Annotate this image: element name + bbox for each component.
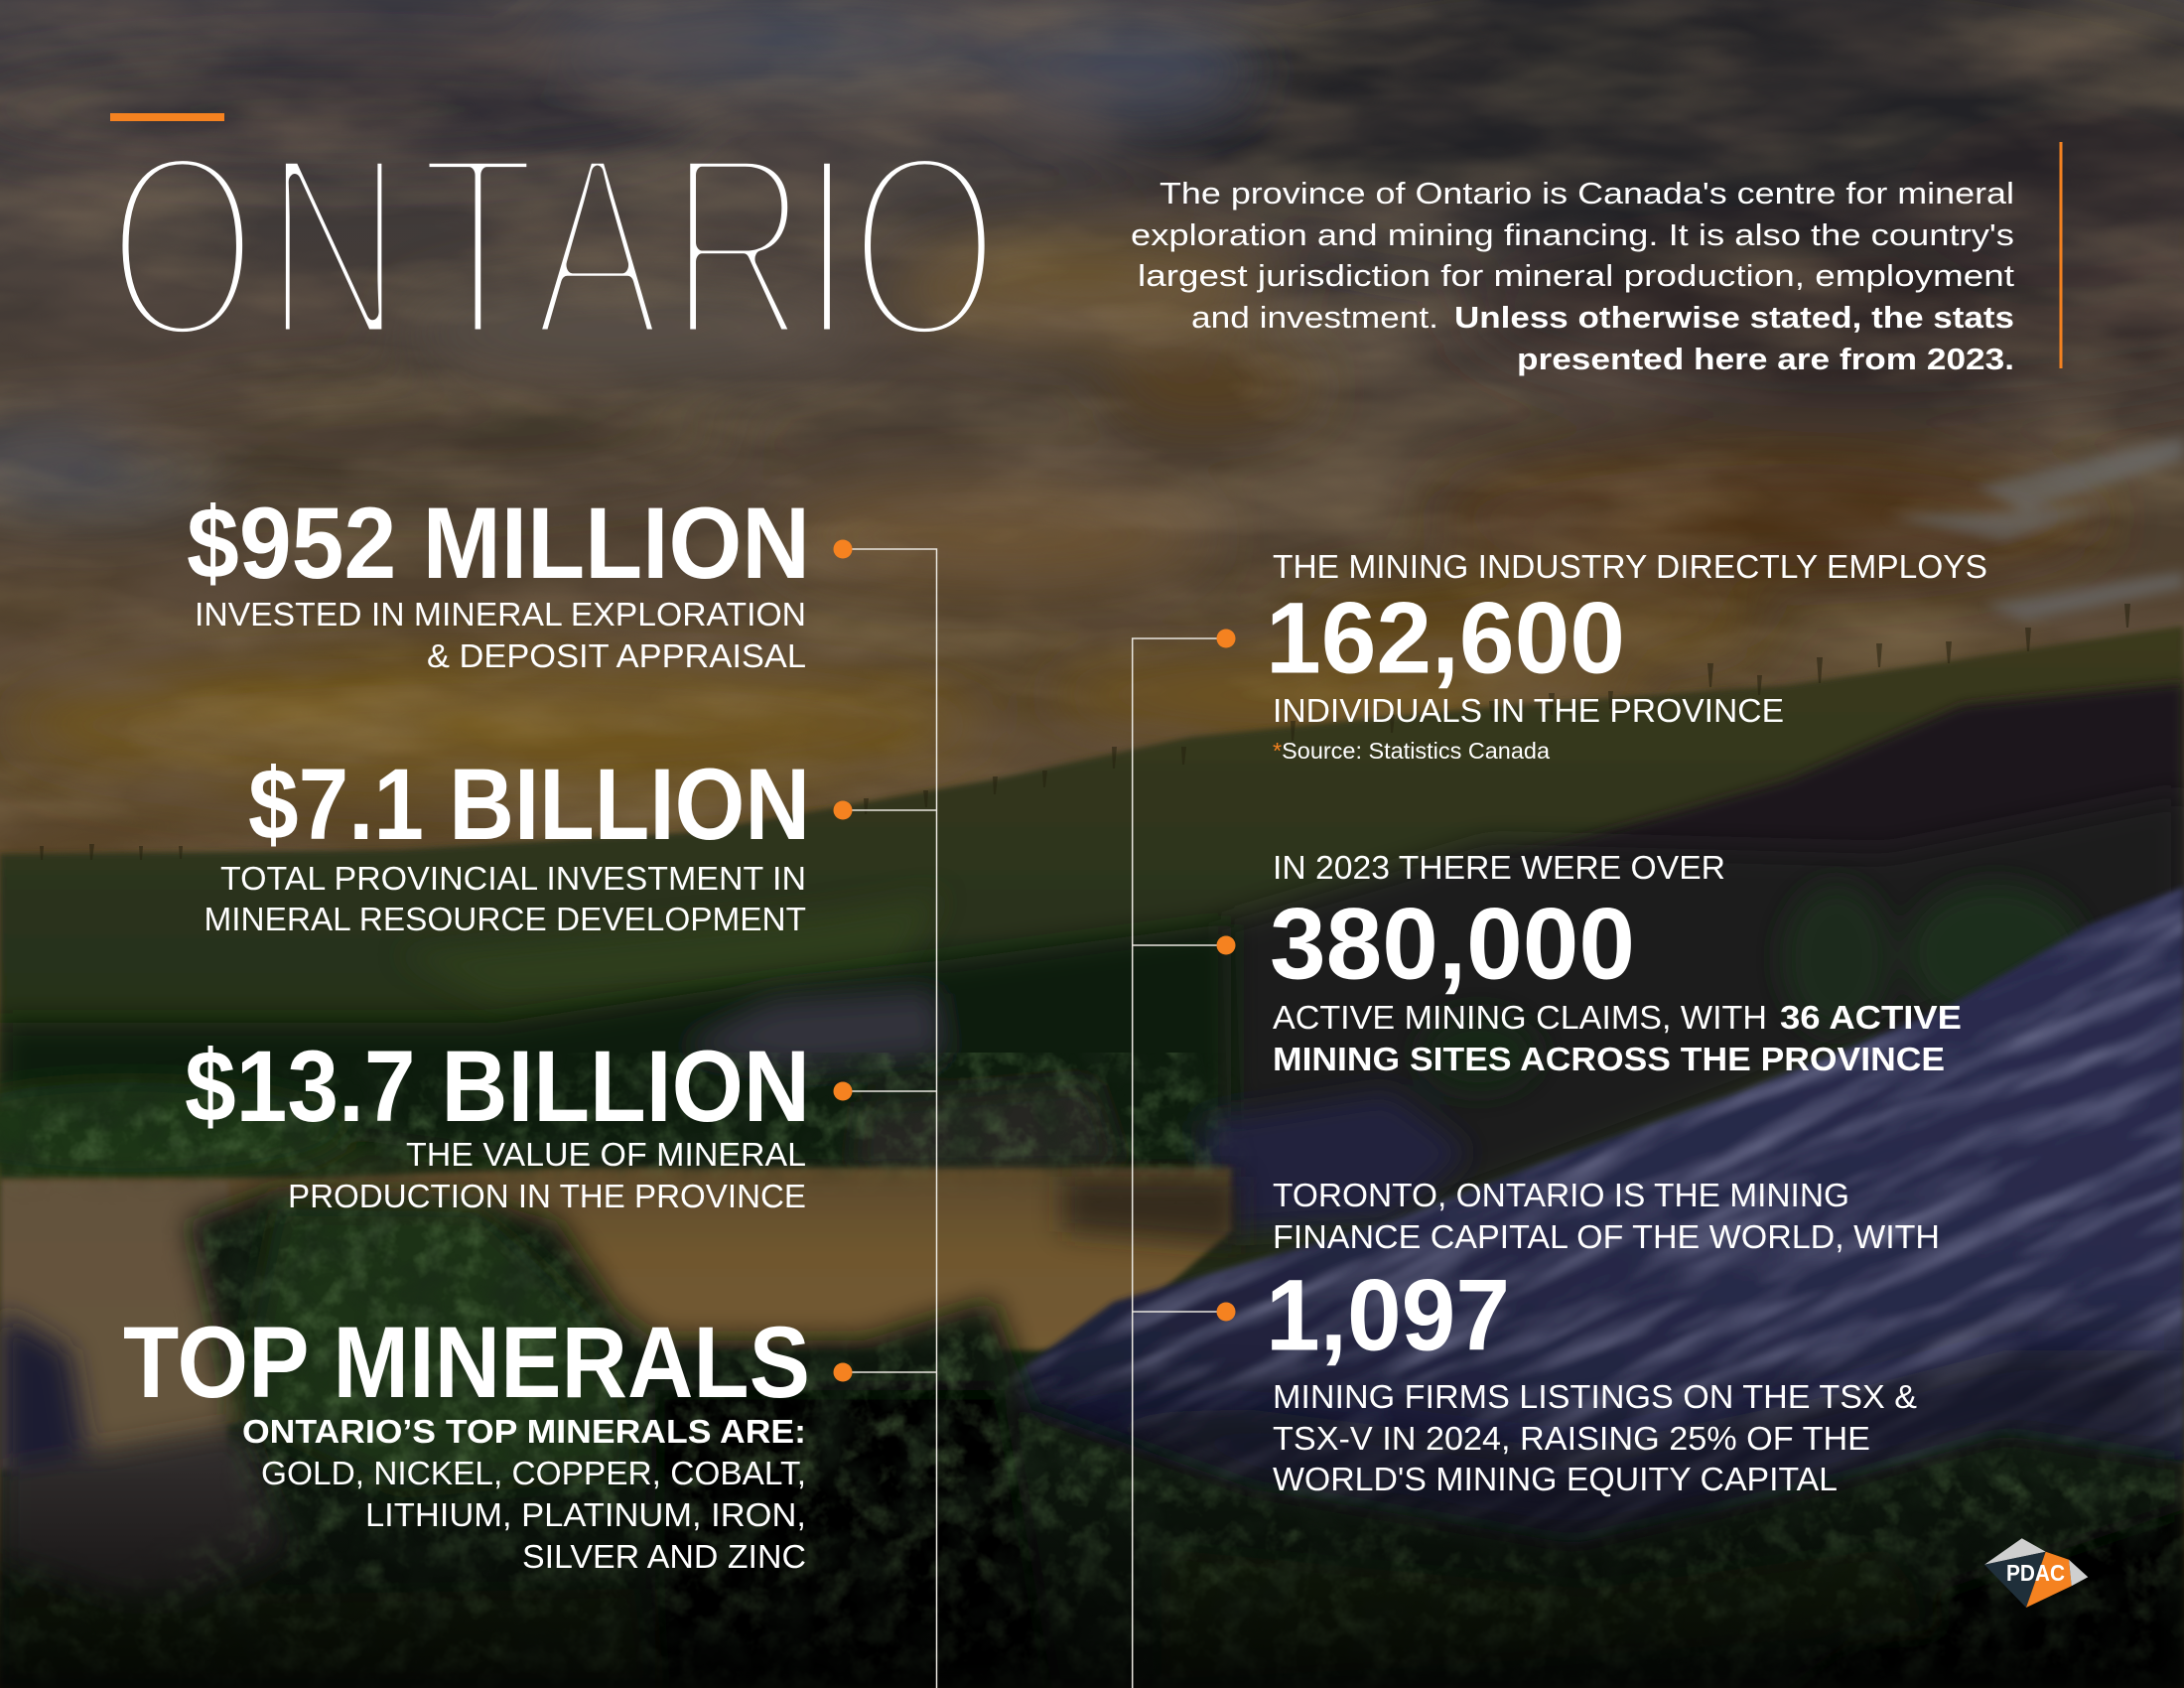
dot marker (834, 800, 852, 820)
top minerals: TOP MINERALS (123, 1306, 810, 1419)
stat: mining employment (1266, 548, 1987, 764)
stat: mining claims: IN 2023 THERE WERE OVER (1273, 849, 1725, 886)
stat: mining employment: THE MINING INDUSTRY DIRECTLY EMPLOYS (1273, 548, 1987, 585)
stat: provincial investment: MINERAL RESOURCE DEVELOPMENT (205, 901, 806, 937)
stat: mineral production value (185, 1030, 810, 1214)
stat: mining claims: 36 ACTIVE (1780, 999, 1962, 1036)
intro paragraph: and investment. (1191, 300, 1438, 335)
stat: mining employment: *Source: Statistics Canada (1273, 738, 1550, 764)
stat: mineral production value: $13.7 BILLION (185, 1030, 810, 1143)
right connector lines (1133, 638, 1226, 1688)
dot marker (834, 540, 852, 558)
left connector lines (843, 549, 937, 1688)
stat: mining claims: ACTIVE MINING CLAIMS, WITH (1273, 999, 1767, 1036)
top minerals: GOLD, NICKEL, COPPER, COBALT, (261, 1455, 806, 1491)
intro paragraph: The province of Ontario is Canada's centre for mineral (1160, 176, 2014, 211)
intro paragraph: presented here are from 2023. (1517, 342, 2014, 376)
stat: mineral production value: PRODUCTION IN THE PROVINCE (288, 1178, 806, 1214)
dot marker (834, 1082, 852, 1100)
rock shaded base (1003, 1350, 2184, 1544)
stat: exploration investment: $952 MILLION (187, 487, 810, 600)
intro paragraph: Unless otherwise stated, the stats (1454, 300, 2014, 335)
top minerals: ONTARIO’S TOP MINERALS ARE: (242, 1413, 806, 1450)
title: ONTARIO (107, 97, 1000, 394)
dot marker (834, 1362, 852, 1382)
stat: provincial investment: $7.1 BILLION (248, 748, 810, 861)
lake (0, 1168, 1231, 1470)
stat: mining claims: MINING SITES ACROSS THE PROVINCE (1273, 1041, 1945, 1077)
PDAC logo (1984, 1538, 2088, 1608)
stat: finance capital: FINANCE CAPITAL OF THE WORLD, WITH (1273, 1218, 1940, 1255)
dark far hillside and boulders (1430, 683, 2184, 1053)
stat: provincial investment (205, 748, 810, 937)
stat: finance capital: WORLD'S MINING EQUITY CAPITAL (1273, 1461, 1838, 1497)
stat: provincial investment: TOTAL PROVINCIAL INVESTMENT IN (220, 860, 806, 897)
intro paragraph: exploration and mining financing. It is also the country's (1131, 217, 2014, 252)
intro paragraph (1131, 176, 2014, 376)
ridge with fields (0, 626, 2184, 1688)
PDAC logo: PDAC (2006, 1560, 2065, 1586)
dot marker (1217, 1303, 1235, 1321)
top minerals: LITHIUM, PLATINUM, IRON, (365, 1496, 806, 1533)
stat: finance capital: TORONTO, ONTARIO IS THE MINING (1273, 1177, 1849, 1213)
intro paragraph: largest jurisdiction for mineral production, employment (1138, 258, 2014, 293)
stat: mining employment: 162,600 (1266, 582, 1625, 695)
stat: mineral production value: THE VALUE OF MINERAL (406, 1136, 806, 1173)
stat: finance capital (1266, 1177, 1940, 1497)
stat: mining employment: INDIVIDUALS IN THE PROVINCE (1273, 692, 1784, 729)
accent bar above title (110, 113, 224, 121)
accent bar beside intro (2059, 142, 2063, 368)
mid slope shadows (0, 884, 2085, 1231)
dot marker (1217, 935, 1235, 955)
top minerals (123, 1306, 810, 1575)
stat: finance capital: TSX-V IN 2024, RAISING 25% OF THE (1273, 1420, 1870, 1457)
rock outcrop (1003, 887, 2184, 1544)
stat: finance capital: 1,097 (1266, 1259, 1510, 1372)
stat: mining claims (1270, 849, 1962, 1077)
stat: exploration investment: INVESTED IN MINERAL EXPLORATION (195, 596, 806, 633)
dot marker (1217, 630, 1235, 647)
stat: finance capital: MINING FIRMS LISTINGS ON THE TSX & (1273, 1378, 1917, 1415)
stat: exploration investment: & DEPOSIT APPRAISAL (427, 637, 806, 674)
lighter field strip (397, 894, 943, 1003)
stat: mining claims: 380,000 (1270, 888, 1635, 1001)
stat: exploration investment (187, 487, 810, 674)
foreground trees (0, 1189, 2184, 1688)
top minerals: SILVER AND ZINC (522, 1538, 806, 1575)
tree line (40, 604, 2130, 860)
